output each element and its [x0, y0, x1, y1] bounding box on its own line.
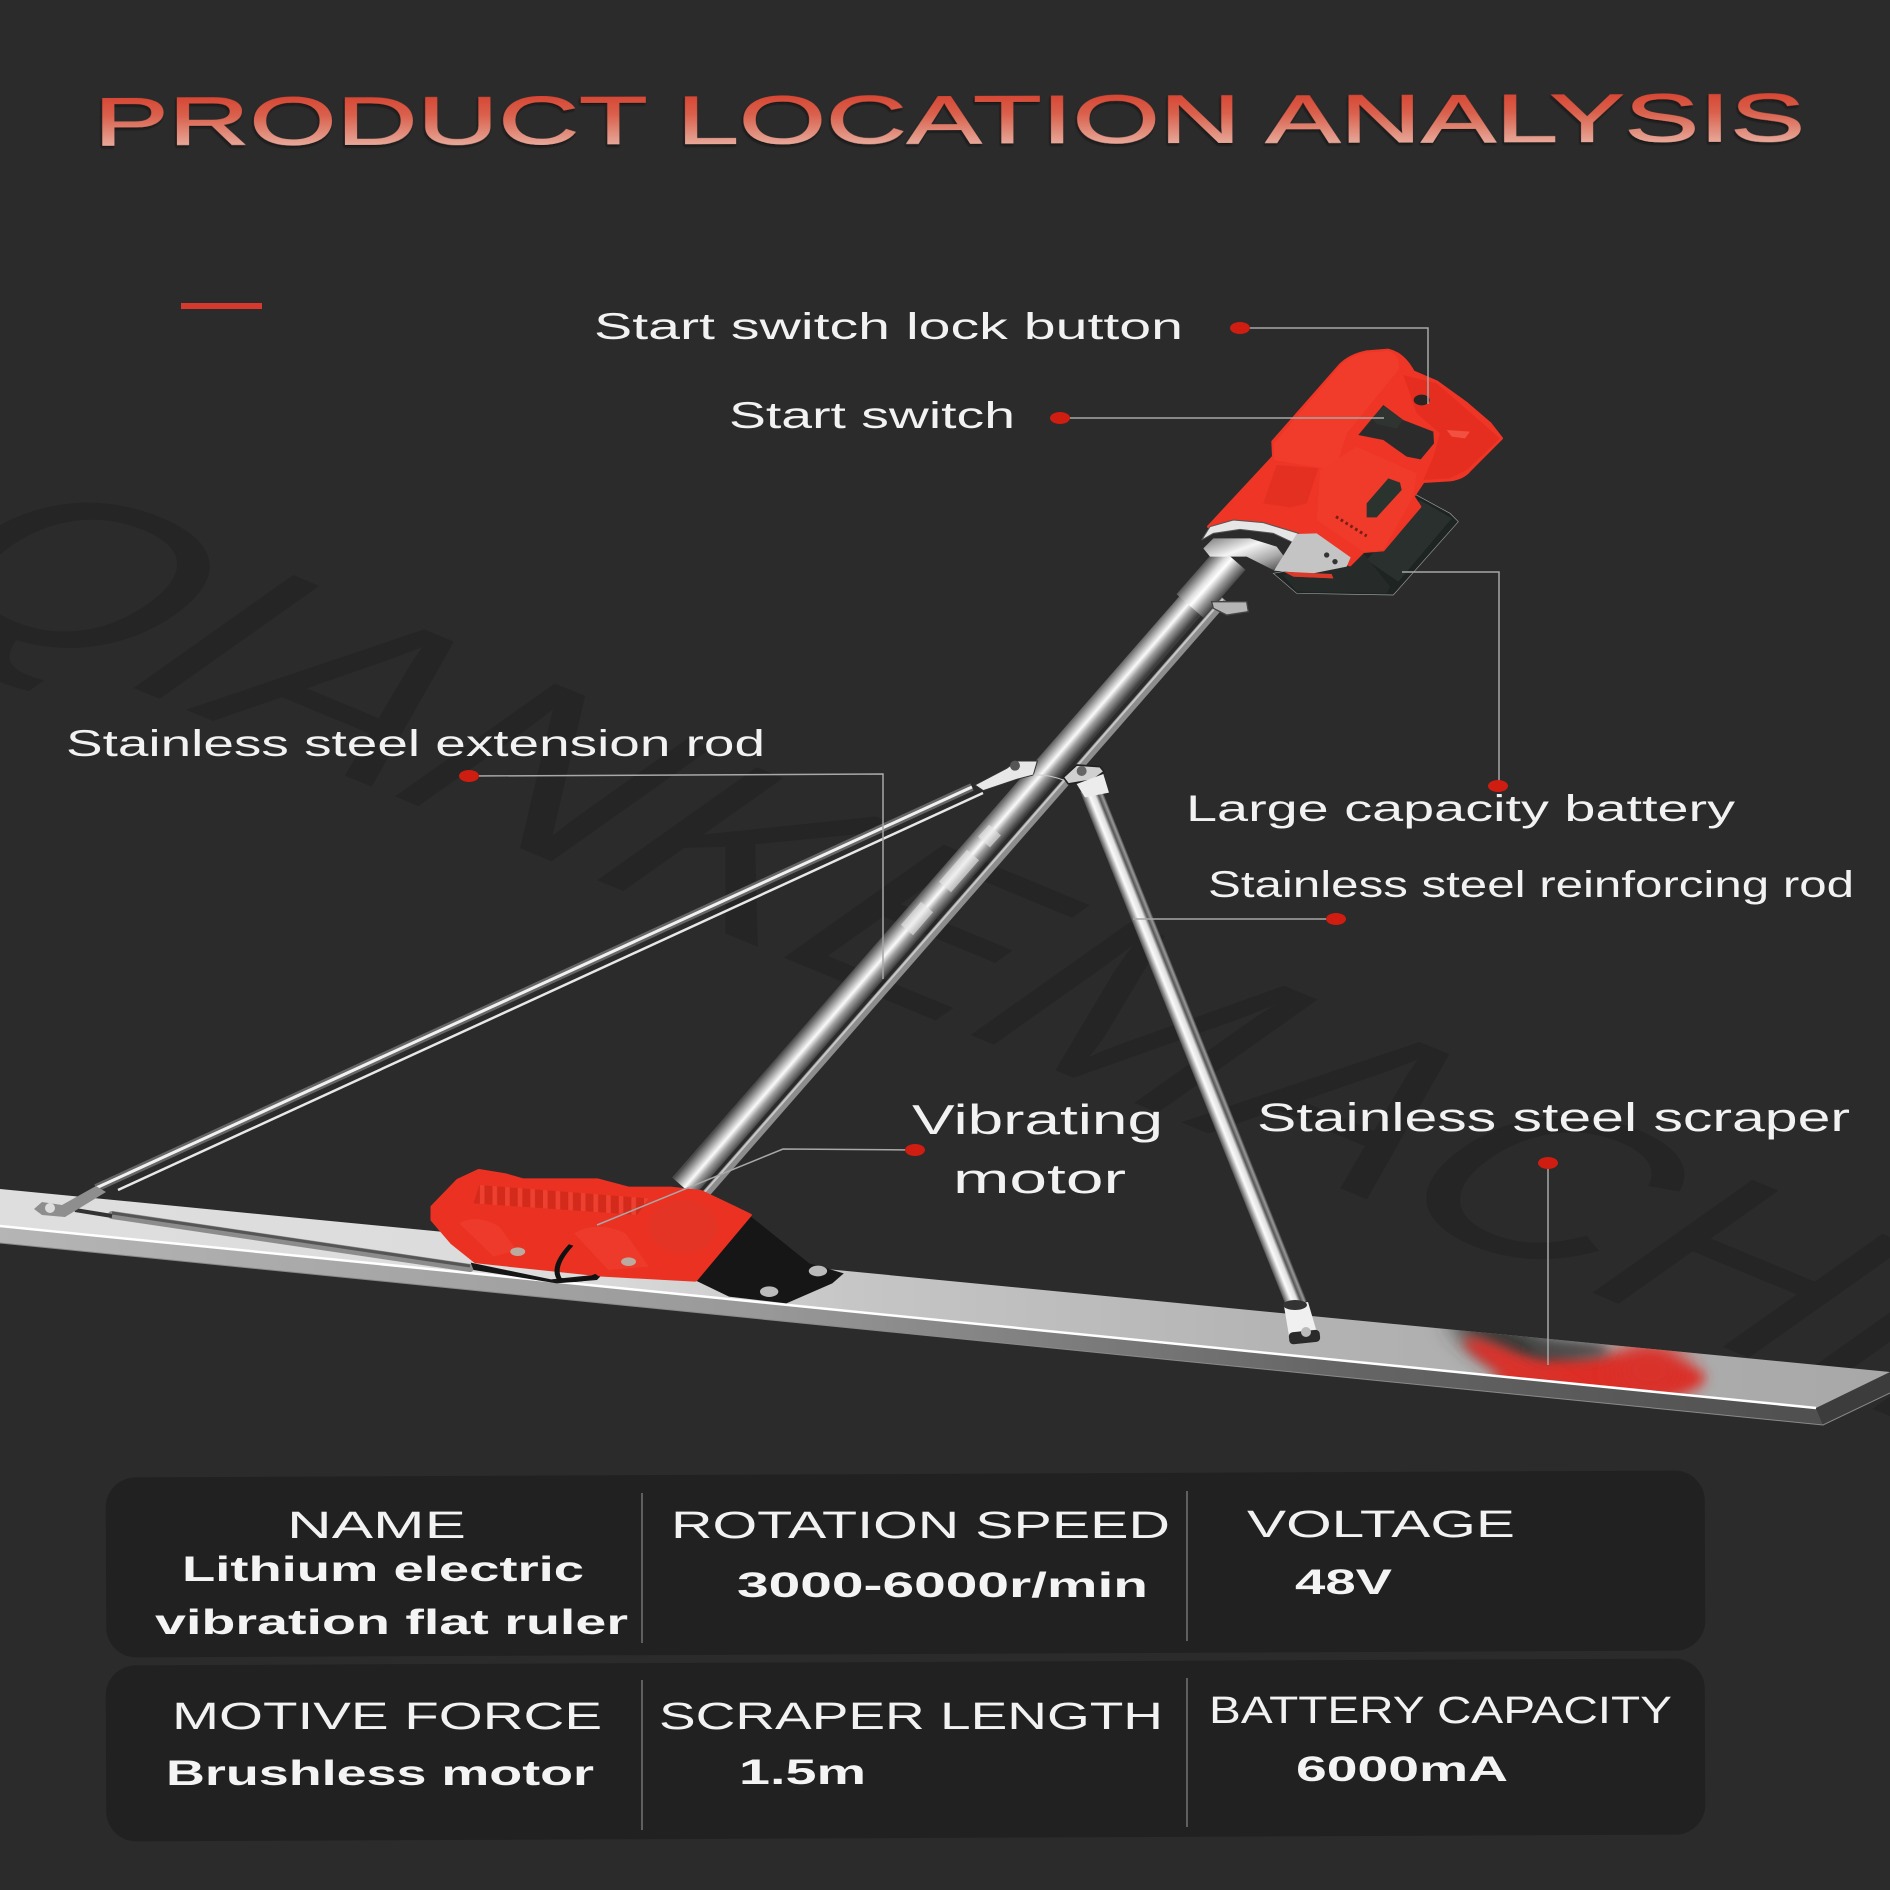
cell: battery capacity: 6000mA: [1296, 1750, 1508, 1789]
leader: reinforcing rod: [1133, 913, 1346, 925]
joint plates: [975, 761, 1109, 797]
leader: large capacity battery: [1402, 572, 1508, 792]
clamp: [1212, 602, 1248, 615]
leader: scraper: [1538, 1157, 1558, 1365]
title: PRODUCT LOCATION ANALYSIS: [94, 80, 1805, 160]
leader: vibrating motor: [597, 1144, 925, 1225]
cell: scraper length: SCRAPER LENGTH: [659, 1696, 1163, 1738]
leader: start switch lock button: [1230, 322, 1428, 404]
extension rods (left stay): [34, 787, 983, 1217]
cell: name: vibration flat ruler: [155, 1603, 629, 1642]
cell: battery capacity: BATTERY CAPACITY: [1209, 1690, 1672, 1732]
reinforcing rod (right stay): [1090, 788, 1321, 1345]
collar: [1202, 520, 1298, 543]
cell: rotation speed: 3000-6000r/min: [737, 1566, 1148, 1605]
ribbed cover: [474, 1185, 649, 1215]
cell: voltage: [1247, 1504, 1515, 1602]
battery: [1273, 493, 1458, 595]
label: start switch lock button: Start switch lock button: [594, 306, 1183, 347]
blade edge highlights: [0, 1226, 1816, 1408]
spec table: [106, 1471, 1705, 1841]
bottom fitting: [1284, 1302, 1318, 1342]
blade right edge: [1816, 1372, 1890, 1425]
side vent: [1367, 478, 1402, 517]
cell: voltage: 48V: [1295, 1563, 1393, 1602]
lower left joint: [34, 1186, 106, 1217]
label: stainless steel extension rod: Stainless steel extension rod: [66, 723, 765, 764]
column dividers: [642, 1491, 1187, 1830]
cell: motive force: Brushless motor: [166, 1754, 595, 1793]
upper joints: [975, 761, 1321, 1345]
upper tube: [1190, 558, 1232, 606]
label: stainless steel reinforcing rod: Stainless steel reinforcing rod: [1208, 864, 1854, 905]
handle opening: [1358, 405, 1434, 459]
blade top face: [0, 1189, 1890, 1408]
housing: [1208, 350, 1502, 565]
neck: [1203, 538, 1287, 570]
shaft highlights: [907, 830, 995, 930]
panel: row 2: [106, 1659, 1705, 1841]
label: vibrating motor: [912, 1096, 1163, 1202]
cell: motive force: [166, 1696, 602, 1793]
motor mount: [695, 1215, 844, 1303]
housing top highlight: [1274, 351, 1399, 470]
start switch: [1372, 406, 1403, 429]
lock button: [1414, 395, 1430, 405]
recess shading: [1263, 465, 1318, 507]
motor feet: [459, 1219, 517, 1257]
blade red reflection: [1436, 1328, 1713, 1395]
label: stainless steel scraper: Stainless steel scraper: [1257, 1096, 1850, 1140]
label: start switch: Start switch: [729, 395, 1015, 436]
label: vibrating motor: motor: [953, 1155, 1126, 1202]
handle shading: [1403, 375, 1500, 480]
label: vibrating motor: Vibrating: [912, 1096, 1163, 1143]
cell: rotation speed: [671, 1505, 1170, 1605]
leader: extension rod: [459, 770, 883, 979]
main shaft: [683, 558, 1232, 1196]
panel: row 1: [106, 1471, 1705, 1657]
red accent dash: [181, 303, 262, 309]
cell: voltage: VOLTAGE: [1247, 1504, 1515, 1546]
motor end cap: [649, 1200, 718, 1253]
vibrating motor: [433, 1171, 844, 1303]
cell: battery capacity: [1209, 1690, 1672, 1789]
cell: scraper length: 1.5m: [739, 1753, 866, 1792]
cell: motive force: MOTIVE FORCE: [172, 1696, 602, 1738]
lower tie rod along the blade: [75, 1210, 470, 1268]
motor cable: [557, 1245, 597, 1281]
cell: name: Lithium electric: [182, 1550, 584, 1589]
scraper blade: [0, 1189, 1890, 1425]
small vents: [1336, 517, 1367, 536]
motor housing: [433, 1171, 749, 1280]
label: large capacity battery: Large capacity battery: [1186, 788, 1736, 829]
tool head: [1202, 350, 1502, 615]
blade front face: [0, 1226, 1823, 1425]
end plate: [1274, 533, 1351, 574]
cell: rotation speed: ROTATION SPEED: [671, 1505, 1170, 1547]
cell: name: [155, 1505, 629, 1642]
cell: scraper length: [659, 1696, 1163, 1792]
leader: start switch: [1050, 412, 1384, 424]
cell: name: NAME: [287, 1505, 466, 1547]
